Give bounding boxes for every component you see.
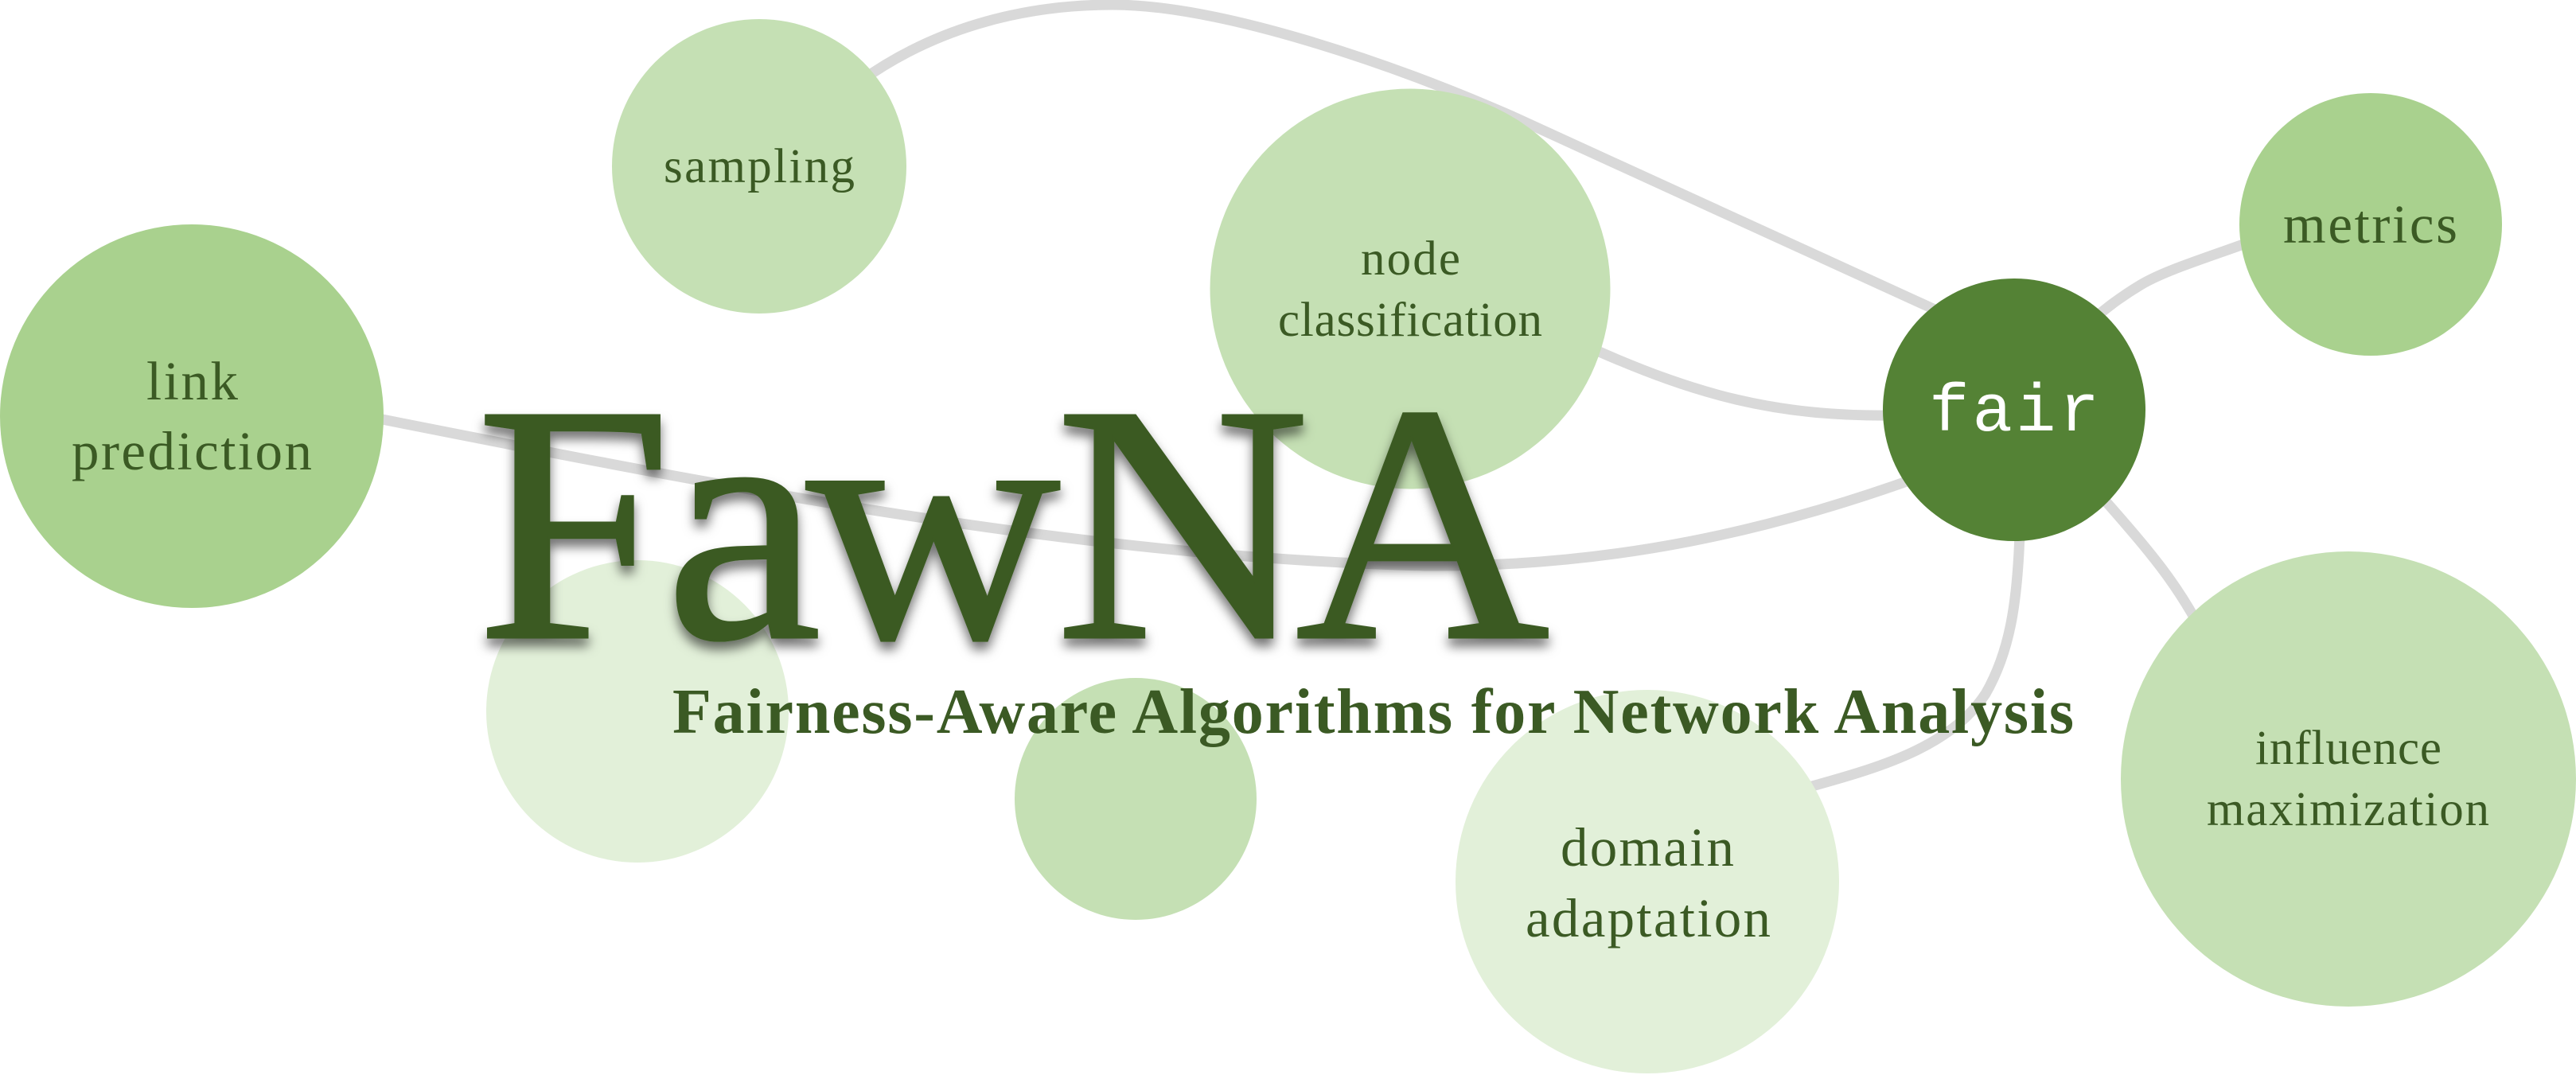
node: influence maximization: maximization	[2207, 783, 2489, 836]
node: metrics	[2239, 93, 2502, 356]
node: node classification: classification	[1278, 294, 1542, 347]
node: domain adaptation	[1456, 690, 1839, 1073]
line: influence maximization to fair	[2085, 477, 2204, 637]
node: fair: fair	[1929, 376, 2099, 451]
node: blank medium circle	[1015, 678, 1257, 920]
node: influence maximization	[2121, 551, 2576, 1007]
node: link prediction: link	[146, 351, 239, 411]
node: link prediction: prediction	[72, 421, 312, 481]
node: node classification: node	[1361, 232, 1460, 286]
node: link prediction	[0, 224, 384, 608]
line: node classification to fair	[1596, 350, 1894, 415]
line: metrics to fair	[2085, 241, 2252, 326]
node: domain adaptation: adaptation	[1526, 888, 1771, 948]
line: link prediction to fair	[374, 418, 1918, 566]
node: sampling	[612, 19, 906, 314]
subtitle: Fairness-Aware Algorithms for Network Analysis	[672, 677, 2074, 747]
node: sampling: sampling	[664, 140, 855, 193]
node: influence maximization: influence	[2255, 722, 2442, 775]
line: domain adaptation to fair	[1806, 533, 2020, 788]
node: blank light circle	[486, 560, 789, 863]
title: FawNA	[476, 337, 1550, 711]
line: sampling to fair	[859, 5, 1942, 313]
node: fair	[1883, 278, 2145, 541]
node: metrics: metrics	[2283, 194, 2457, 255]
node: domain adaptation: domain	[1561, 817, 1734, 878]
node: node classification	[1210, 89, 1611, 489]
connector lines to fair node	[374, 5, 2252, 788]
